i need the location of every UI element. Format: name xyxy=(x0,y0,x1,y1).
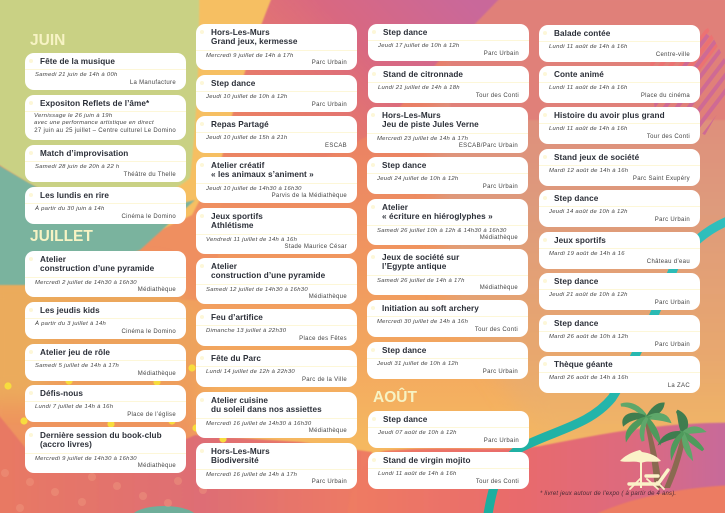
venue: Place de l’église xyxy=(127,412,176,418)
yellow and pale dots xyxy=(4,364,227,443)
heading: Août: AOÛT xyxy=(373,389,417,406)
event title xyxy=(382,110,479,129)
date: Mercredi 9 juillet de 14h à 17h xyxy=(206,52,294,58)
card: Step dance 14 août xyxy=(539,190,700,226)
card: Atelier créatif xyxy=(196,157,357,202)
card: Fête de la musique xyxy=(25,53,186,90)
card: Repas Partagé xyxy=(196,116,357,152)
card: Initiation au soft archery xyxy=(367,300,528,336)
date: Dimanche 13 juillet à 22h30 xyxy=(206,328,286,334)
date: Mardi 26 août de 10h à 12h xyxy=(549,334,628,340)
date: Samedi 5 juillet de 14h à 17h xyxy=(35,363,119,369)
date: Lundi 11 août de 14h à 16h xyxy=(378,471,457,477)
event title: Thèque géante xyxy=(554,360,613,368)
card: Dernière session du book-club xyxy=(25,427,186,472)
venue: Parc Urbain xyxy=(655,216,690,222)
card: Stand de virgin mojito xyxy=(368,452,529,488)
card: Atelier écriture en hiéroglyphes xyxy=(367,199,528,244)
venue: Stade Maurice César xyxy=(285,244,347,250)
green top-left xyxy=(0,0,199,215)
footnote: * livret jeux autour de l'expo ( à partir de 4 ans). xyxy=(540,491,676,497)
venue: Château d’eau xyxy=(647,258,690,264)
yellow band xyxy=(150,0,275,235)
venue: La ZAC xyxy=(668,382,690,388)
deckchair xyxy=(629,470,668,489)
event title: Step dance xyxy=(554,194,598,202)
magenta top wedge xyxy=(215,0,508,180)
event title: Athlétisme xyxy=(211,221,254,230)
event title xyxy=(211,212,263,230)
card: Conte animé xyxy=(539,66,700,102)
card: Stand jeux de société xyxy=(539,149,700,186)
event title: Les jeudis kids xyxy=(40,306,100,314)
date: Mardi 19 août de 14h à 16 xyxy=(549,251,625,257)
event title: du soleil dans nos assiettes xyxy=(211,405,322,414)
venue: Parc Urbain xyxy=(655,342,690,348)
event title: Stand de citronnade xyxy=(383,70,463,78)
event title: Dernière session du book-club xyxy=(40,430,162,440)
date: Mercredi 2 juillet de 14h30 à 16h30 xyxy=(35,280,137,286)
venue: Cinéma le Domino xyxy=(122,328,176,334)
date: Mercredi 30 juillet de 14h à 16h xyxy=(377,319,468,325)
card: Thèque géante xyxy=(539,356,700,392)
card: Feu d'artifice xyxy=(196,309,357,346)
venue: Théâtre du Thelle xyxy=(124,172,176,178)
card: Atelier construction d'une pyramide xyxy=(25,251,186,296)
event title: Step dance xyxy=(554,276,598,286)
venue: Place du cinéma xyxy=(641,92,690,98)
card: Jeux de société sur l'Egypte antique xyxy=(367,249,528,294)
date: À partir du 3 juillet à 14h xyxy=(35,321,106,327)
event title: Hors-Les-Murs xyxy=(211,28,270,36)
event title: construction d’une pyramide xyxy=(211,271,325,280)
heading: Juillet: JUILLET xyxy=(30,228,93,245)
card: Step dance 17 juillet xyxy=(368,24,529,60)
card: Stand de citronnade xyxy=(368,66,529,102)
event title: Atelier jeu de rôle xyxy=(40,348,110,356)
date: Lundi 11 août de 14h à 16h xyxy=(549,85,628,91)
event title: Jeux sportifs xyxy=(554,236,606,244)
event title: Fête de la musique xyxy=(40,56,115,66)
event title: Jeux sportifs xyxy=(211,212,263,220)
date: Mercredi 23 juillet de 14h à 17h xyxy=(377,136,468,142)
venue: Médiathèque xyxy=(138,370,176,376)
event title xyxy=(211,446,270,465)
card: Step dance 07 août xyxy=(368,411,529,448)
event title xyxy=(382,202,493,221)
event title: Atelier xyxy=(382,202,408,212)
card: Step dance 31 juillet xyxy=(367,342,528,378)
date: Jeudi 07 août de 10h à 12h xyxy=(378,430,457,436)
venue: Médiathèque xyxy=(480,284,518,290)
date: Mercredi 9 juillet de 14h30 à 16h30 xyxy=(35,456,137,462)
date: À partir du 30 juin à 14h xyxy=(35,206,105,212)
event title: Grand jeux, kermesse xyxy=(211,37,298,46)
event title xyxy=(211,262,325,280)
date: Jeudi 31 juillet de 10h à 12h xyxy=(377,361,458,367)
date: Lundi 21 juillet de 14h à 18h xyxy=(378,85,460,91)
date: Jeudi 21 août de 10h à 12h xyxy=(549,292,628,298)
event title: Atelier créatif xyxy=(211,160,264,170)
date: Vernissage le 26 juin à 19h xyxy=(34,113,112,119)
date: Samedi 26 juillet 10h à 12h & 14h30 à 16h30 xyxy=(377,228,507,234)
venue: Tour des Conti xyxy=(475,326,518,332)
event title xyxy=(211,28,298,46)
palm tree left xyxy=(621,404,669,488)
event title: construction d’une pyramide xyxy=(40,264,154,273)
date: Jeudi 10 juillet de 15h à 21h xyxy=(206,135,287,141)
card: Jeux sportifs xyxy=(539,232,700,268)
event title xyxy=(382,252,460,271)
event title: Jeux de société sur xyxy=(382,252,459,262)
date: Jeudi 17 juillet de 10h à 12h xyxy=(378,43,459,49)
venue: Parc Urbain xyxy=(483,184,518,190)
event title xyxy=(40,430,162,449)
event title: Biodiversité xyxy=(211,456,259,465)
event title: Step dance xyxy=(382,160,426,170)
card: Step dance 24 juillet xyxy=(367,157,528,194)
teal river xyxy=(487,220,725,513)
venue: 27 juin au 25 juillet – Centre culturel Le Domino xyxy=(34,128,176,134)
event title: Step dance xyxy=(383,414,427,424)
left lower xyxy=(0,270,205,480)
card: Atelier construction d'une pyramide xyxy=(196,258,357,304)
date: Samedi 21 juin de 14h à 00h xyxy=(35,72,118,78)
event title: (accro livres) xyxy=(40,440,92,449)
card: Atelier jeu de rôle xyxy=(25,344,186,380)
date: Jeudi 24 juillet de 10h à 12h xyxy=(377,176,458,182)
orange under green xyxy=(135,160,225,300)
stripes xyxy=(650,28,725,135)
date: Jeudi 14 août de 10h à 12h xyxy=(549,209,628,215)
event title: Stand jeux de société xyxy=(554,152,639,162)
card: Balade contée xyxy=(539,25,700,62)
venue: Tour des Conti xyxy=(476,92,519,98)
venue: Médiathèque xyxy=(309,428,347,434)
event title: Les lundis en rire xyxy=(40,190,109,200)
event title: Step dance xyxy=(211,78,255,88)
event title: « les animaux s’animent » xyxy=(211,170,314,179)
card: Step dance 21 août xyxy=(539,273,700,310)
date: Mardi 12 août de 14h à 16h xyxy=(549,168,628,174)
venue: Cinéma le Domino xyxy=(122,214,176,220)
venue: Parc Urbain xyxy=(484,438,519,444)
venue: Médiathèque xyxy=(138,462,176,468)
event title: l’Egypte antique xyxy=(382,262,446,271)
card: Hors-Les-Murs Biodiversité xyxy=(196,443,357,488)
event title: Histoire du avoir plus grand xyxy=(554,110,665,120)
venue: Parc Saint Exupéry xyxy=(633,176,690,182)
event title: Atelier cuisine xyxy=(211,396,268,404)
venue: Médiathèque xyxy=(480,234,518,240)
teal area xyxy=(0,154,195,285)
event title: Initiation au soft archery xyxy=(382,304,479,312)
event title: Jeu de piste Jules Verne xyxy=(382,120,479,129)
date: Jeudi 10 juillet de 14h30 à 16h30 xyxy=(206,186,302,192)
venue: Parc Urbain xyxy=(483,368,518,374)
card: Défis-nous xyxy=(25,385,186,422)
date: Lundi 11 août de 14h à 16h xyxy=(549,126,628,132)
event title: Step dance xyxy=(383,28,427,36)
venue: ESCAB/Parc Urbain xyxy=(459,142,518,148)
event title: Fête du Parc xyxy=(211,354,261,362)
parasol xyxy=(620,450,661,488)
event title: Balade contée xyxy=(554,28,610,38)
venue: Médiathèque xyxy=(138,286,176,292)
event title: Step dance xyxy=(554,318,598,328)
venue: Médiathèque xyxy=(309,294,347,300)
venue: Parvis de la Médiathèque xyxy=(272,192,347,198)
event title: Atelier xyxy=(211,262,237,270)
venue: Parc Urbain xyxy=(312,102,347,108)
event title: Hors-Les-Murs xyxy=(211,446,270,456)
event title: Expositon Reflets de l’âme* xyxy=(40,98,149,108)
event title: Défis-nous xyxy=(40,388,83,398)
venue: Tour des Conti xyxy=(476,478,519,484)
date: avec une performance artistique en direct xyxy=(34,120,154,126)
event title: Repas Partagé xyxy=(211,120,269,128)
card: Step dance 26 août xyxy=(539,315,700,352)
card: Hors-Les-Murs Grand jeux xyxy=(196,24,357,70)
event title: Conte animé xyxy=(554,70,604,78)
date xyxy=(34,113,154,126)
event title: Stand de virgin mojito xyxy=(383,456,471,464)
date: Mercredi 16 juillet de 14h30 à 16h30 xyxy=(206,420,311,426)
event title: Atelier xyxy=(40,254,66,264)
date: Mardi 26 août de 14h à 16h xyxy=(549,375,628,381)
card: Step dance 10 juillet xyxy=(196,75,357,112)
heading: Juin: JUIN xyxy=(30,32,65,49)
palm tree right xyxy=(661,411,703,488)
event title: Match d’improvisation xyxy=(40,148,128,158)
venue: Parc Urbain xyxy=(655,300,690,306)
event title xyxy=(211,160,314,179)
card: Jeux sportifs Athlétisme xyxy=(196,208,357,254)
venue: Parc Urbain xyxy=(312,60,347,66)
event title: Feu d’artifice xyxy=(211,312,263,322)
event title xyxy=(40,254,154,273)
date: Jeudi 10 juillet de 10h à 12h xyxy=(206,94,287,100)
card: Les jeudis kids xyxy=(25,302,186,338)
card: Histoire du avoir plus grand xyxy=(539,107,700,144)
venue: Parc Urbain xyxy=(312,478,347,484)
card: Les lundis en rire xyxy=(25,187,186,224)
venue: Place des Fêtes xyxy=(299,336,347,342)
date: Lundi 14 juillet de 12h à 22h30 xyxy=(206,369,295,375)
card: Match d'improvisation xyxy=(25,145,186,182)
event title xyxy=(211,396,322,414)
card: Jeu de piste Jules Verne xyxy=(367,107,528,152)
venue: ESCAB xyxy=(325,142,347,148)
event title: Hors-Les-Murs xyxy=(382,110,441,120)
right panel wash xyxy=(430,0,725,470)
venue: Centre-ville xyxy=(656,52,690,58)
date: Mercredi 16 juillet de 14h à 17h xyxy=(206,472,297,478)
bottom left red xyxy=(0,392,372,513)
date: Lundi 11 août de 14h à 16h xyxy=(549,44,628,50)
venue: Parc de la Ville xyxy=(302,376,347,382)
venue: La Manufacture xyxy=(130,80,176,86)
card: Exposition Reflets de l'âme xyxy=(25,95,186,140)
date: Lundi 7 juillet de 14h à 16h xyxy=(35,404,113,410)
date: Samedi 26 juillet de 14h à 17h xyxy=(377,278,465,284)
date: Vendredi 11 juillet de 14h à 16h xyxy=(206,236,297,242)
card: Atelier cuisine xyxy=(196,392,357,438)
bottom coral and pink mound xyxy=(345,423,725,513)
venue: Tour des Conti xyxy=(647,134,690,140)
date: Samedi 12 juillet de 14h30 à 16h30 xyxy=(206,286,308,292)
venue: Parc Urbain xyxy=(484,50,519,56)
card: Fête du Parc xyxy=(196,350,357,386)
date: Samedi 28 juin de 20h à 22 h xyxy=(35,164,119,170)
bottom teal mound xyxy=(131,506,197,513)
event title: « écriture en hiéroglyphes » xyxy=(382,212,493,221)
event title: Step dance xyxy=(382,346,426,354)
